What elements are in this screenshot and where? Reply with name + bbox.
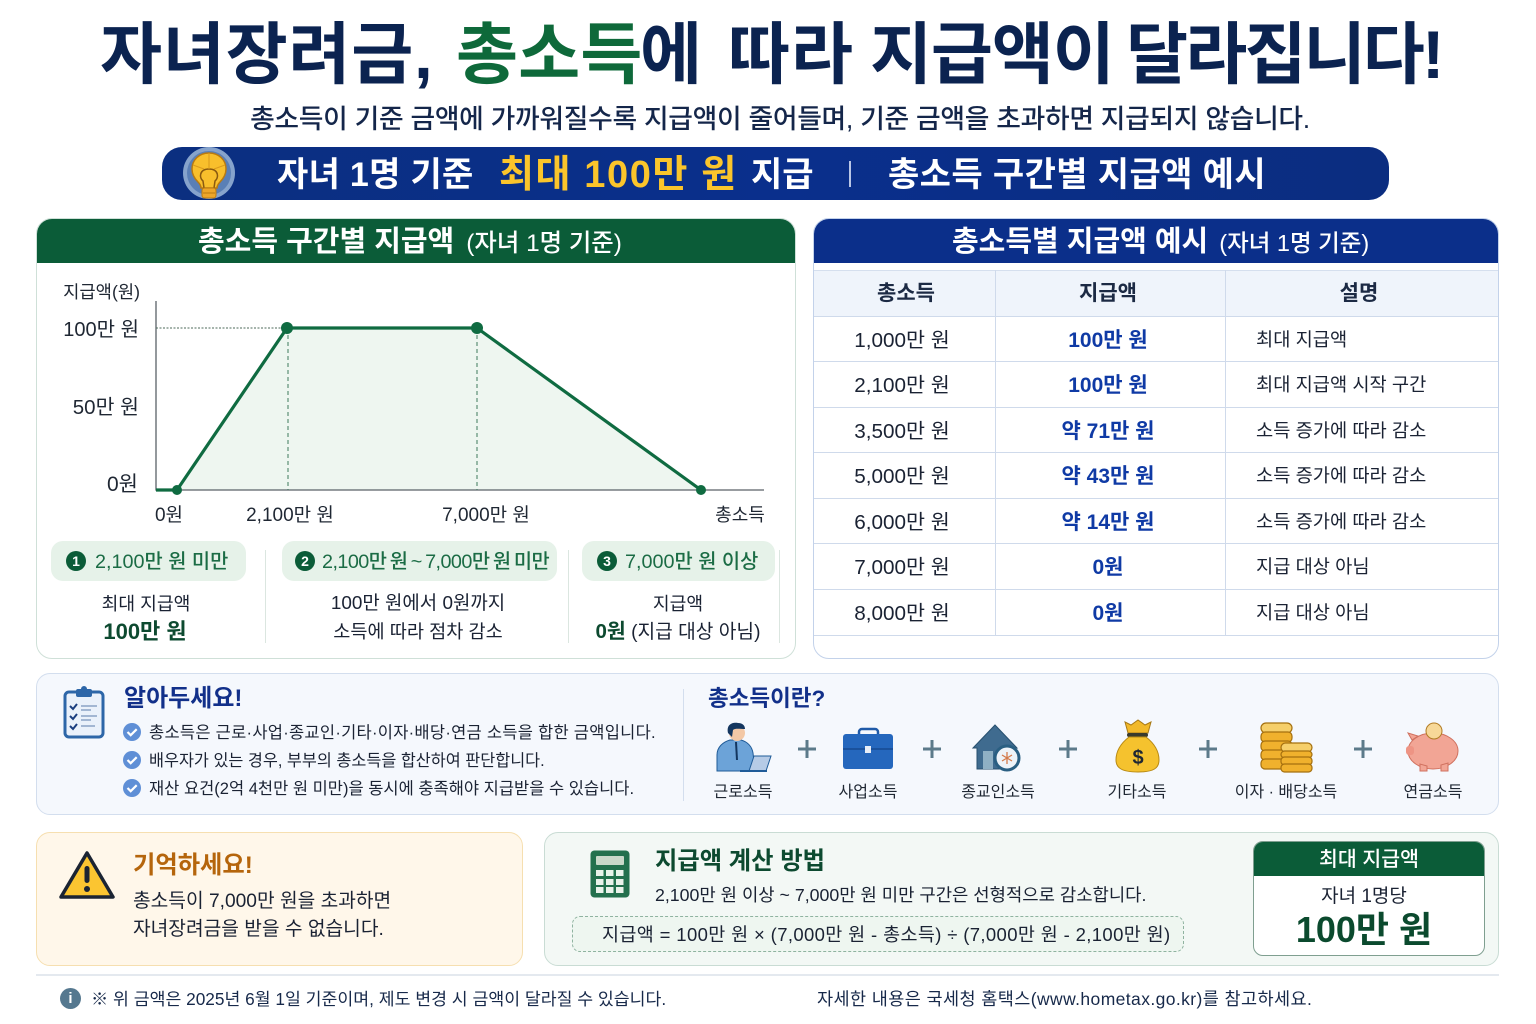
icon: warning <box>59 851 115 899</box>
segment 2 pill: 2 <box>301 553 309 569</box>
banner text right: 총소득 구간별 지급액 예시 <box>888 156 1266 194</box>
note 2: 배우자가 있는 경우, 부부의 총소득을 합산하여 판단합니다. <box>149 752 545 770</box>
row 4 <box>854 465 1426 488</box>
segment 2 pill <box>282 541 557 581</box>
title: 지급액이 <box>870 18 1114 93</box>
segment 3 pill: 7,000만 원 이상 <box>625 551 758 573</box>
calc heading: 지급액 계산 방법 <box>655 848 825 875</box>
icon: info <box>60 988 81 1009</box>
table header: 지급액 <box>1079 282 1137 305</box>
panel: remember: 자녀장려금을 받을 수 없습니다. <box>133 919 384 940</box>
calc description: 2,100만 원 이상 ~ 7,000만 원 미만 구간은 선형적으로 감소합니다. <box>655 885 1146 905</box>
panel heading <box>36 218 796 263</box>
icon: money bag: $ <box>1132 747 1144 769</box>
title: 총소득 <box>456 18 642 93</box>
income labels: 사업소득 <box>839 783 897 801</box>
row 4: 소득 증가에 따라 감소 <box>1256 465 1426 486</box>
max amount card: 최대 지급액 <box>1319 848 1419 871</box>
axis labels: 0원 <box>155 504 183 526</box>
axis labels: 지급액(원) <box>63 282 140 302</box>
icon: money bag <box>1116 720 1159 772</box>
row 1: 100만 원 <box>1068 329 1148 352</box>
panel heading: 총소득 구간별 지급액 (자녀 1명 기준) <box>198 226 622 258</box>
title <box>100 18 1442 93</box>
segment 2 pill: 2,100만 원 ~ 7,000만 원 미만 <box>322 551 549 573</box>
remember text: 총소득이 7,000만 원을 초과하면 <box>133 891 391 912</box>
row 2 <box>854 374 1426 397</box>
row 3: 3,500만 원 <box>854 420 950 443</box>
row 1: 1,000만 원 <box>854 329 950 352</box>
row 5: 약 14만 원 <box>1062 511 1154 534</box>
row 6: 지급 대상 아님 <box>1256 556 1370 577</box>
axis labels: 7,000만 원 <box>442 504 530 526</box>
axis labels: 0원 <box>107 473 138 496</box>
row 5 <box>854 511 1426 534</box>
calc formula: 지급액 = 100만 원 × (7,000만 원 - 총소득) ÷ (7,000만 원 - 2,100만 원) <box>602 924 1171 945</box>
icon: house <box>973 725 1019 770</box>
segment 2 <box>282 541 557 642</box>
icon: checks <box>123 723 141 797</box>
title: 따라 <box>728 18 854 93</box>
icon: briefcase <box>843 729 893 769</box>
max amount card: 100만 원 <box>1296 909 1432 950</box>
title: 자녀장려금, <box>100 18 433 93</box>
segment 3 pill <box>582 541 775 581</box>
table heading <box>813 218 1499 263</box>
income labels: 종교인소득 <box>961 783 1035 801</box>
table <box>814 270 1498 636</box>
banner text pay: 지급 <box>751 156 814 194</box>
panel: chart panel <box>36 218 796 659</box>
footnote: ※ 위 금액은 2025년 6월 1일 기준이며, 제도 변경 시 금액이 달라질 수 있습니다. <box>91 989 666 1009</box>
row 2: 2,100만 원 <box>854 374 950 397</box>
panel: remember <box>36 832 523 966</box>
row 2: 100만 원 <box>1068 374 1148 397</box>
segment 2: 소득에 따라 점차 감소 <box>333 621 503 642</box>
plus signs <box>798 740 1372 758</box>
segment 2: 100만 원에서 0원까지 <box>331 593 505 614</box>
income heading: 총소득이란? <box>708 686 825 711</box>
row 7: 8,000만 원 <box>854 602 950 625</box>
panel: table panel <box>813 218 1499 659</box>
table header: 설명 <box>1340 282 1378 305</box>
title: 에 <box>640 18 702 93</box>
axis labels <box>63 282 765 526</box>
table header <box>814 270 1498 317</box>
row 1 <box>854 329 1347 352</box>
row 6 <box>854 556 1370 579</box>
segment 3: 지급액 <box>653 594 703 614</box>
segment 1 pill: 2,100만 원 미만 <box>95 551 228 573</box>
segment 1: 최대 지급액 <box>102 594 190 614</box>
icon: worker <box>717 723 771 771</box>
segment 3 <box>582 541 775 643</box>
axis labels: 2,100만 원 <box>246 504 334 526</box>
title: 달라집니다! <box>1126 18 1442 93</box>
area fill <box>177 328 701 490</box>
row 4: 5,000만 원 <box>854 465 950 488</box>
data line <box>156 328 701 490</box>
icon: light bulb <box>183 147 235 199</box>
icon: piggy bank <box>1406 723 1458 771</box>
segment 1 <box>51 541 246 644</box>
note 1: 총소득은 근로·사업·종교인·기타·이자·배당·연금 소득을 합한 금액입니다. <box>149 724 656 742</box>
row 3: 소득 증가에 따라 감소 <box>1256 420 1426 441</box>
icon: info: i <box>68 990 73 1007</box>
calc formula <box>572 916 1184 952</box>
row 6: 0원 <box>1092 556 1124 579</box>
row 7: 0원 <box>1092 602 1124 625</box>
banner text left: 자녀 1명 기준 <box>277 156 474 194</box>
row 1: 최대 지급액 <box>1256 329 1347 350</box>
row 5: 6,000만 원 <box>854 511 950 534</box>
icon: calculator <box>590 850 630 898</box>
row 4: 약 43만 원 <box>1062 465 1154 488</box>
subtitle: 총소득이 기준 금액에 가까워질수록 지급액이 줄어들며, 기준 금액을 초과하면 지급되지 않습니다. <box>250 104 1310 134</box>
row 7: 지급 대상 아님 <box>1256 602 1370 623</box>
panel: calculation <box>544 832 1499 966</box>
axis labels: 100만 원 <box>63 318 139 341</box>
table heading: 총소득별 지급액 예시 (자녀 1명 기준) <box>952 226 1369 258</box>
income labels <box>714 783 1462 801</box>
banner <box>162 147 1389 200</box>
table header: 총소득 <box>877 282 935 305</box>
banner highlight: 최대 100만 원 <box>499 154 738 196</box>
remember heading: 기억하세요! <box>133 852 253 879</box>
icon: coins <box>1261 723 1312 772</box>
icon: clipboard <box>64 686 104 738</box>
note 3: 재산 요건(2억 4천만 원 미만)을 동시에 충족해야 지급받을 수 있습니다. <box>149 780 634 798</box>
row 6: 7,000만 원 <box>854 556 950 579</box>
segment 1: 100만 원 <box>103 619 187 644</box>
row 7 <box>854 602 1370 625</box>
notes heading: 알아두세요! <box>124 685 242 712</box>
income labels: 연금소득 <box>1404 783 1462 801</box>
segment 1 pill <box>51 541 246 581</box>
row 2: 최대 지급액 시작 구간 <box>1256 374 1426 395</box>
axis labels: 50만 원 <box>73 396 139 419</box>
segment 3: 0원 (지급 대상 아님) <box>596 620 760 643</box>
footer reference: 자세한 내용은 국세청 홈택스(www.hometax.go.kr)를 참고하세요. <box>817 989 1312 1009</box>
income labels: 이자 · 배당소득 <box>1235 783 1337 801</box>
max amount card <box>1253 841 1485 956</box>
segment 1 pill: 1 <box>72 553 80 569</box>
row 3 <box>854 420 1426 443</box>
max amount card: 자녀 1명당 <box>1321 886 1407 907</box>
income labels: 기타소득 <box>1108 783 1166 801</box>
row 5: 소득 증가에 따라 감소 <box>1256 511 1426 532</box>
segment 3 pill: 3 <box>603 553 611 569</box>
row 3: 약 71만 원 <box>1062 420 1154 443</box>
axis labels: 총소득 <box>715 505 765 525</box>
income labels: 근로소득 <box>714 784 772 801</box>
panel: notes <box>36 673 1499 815</box>
